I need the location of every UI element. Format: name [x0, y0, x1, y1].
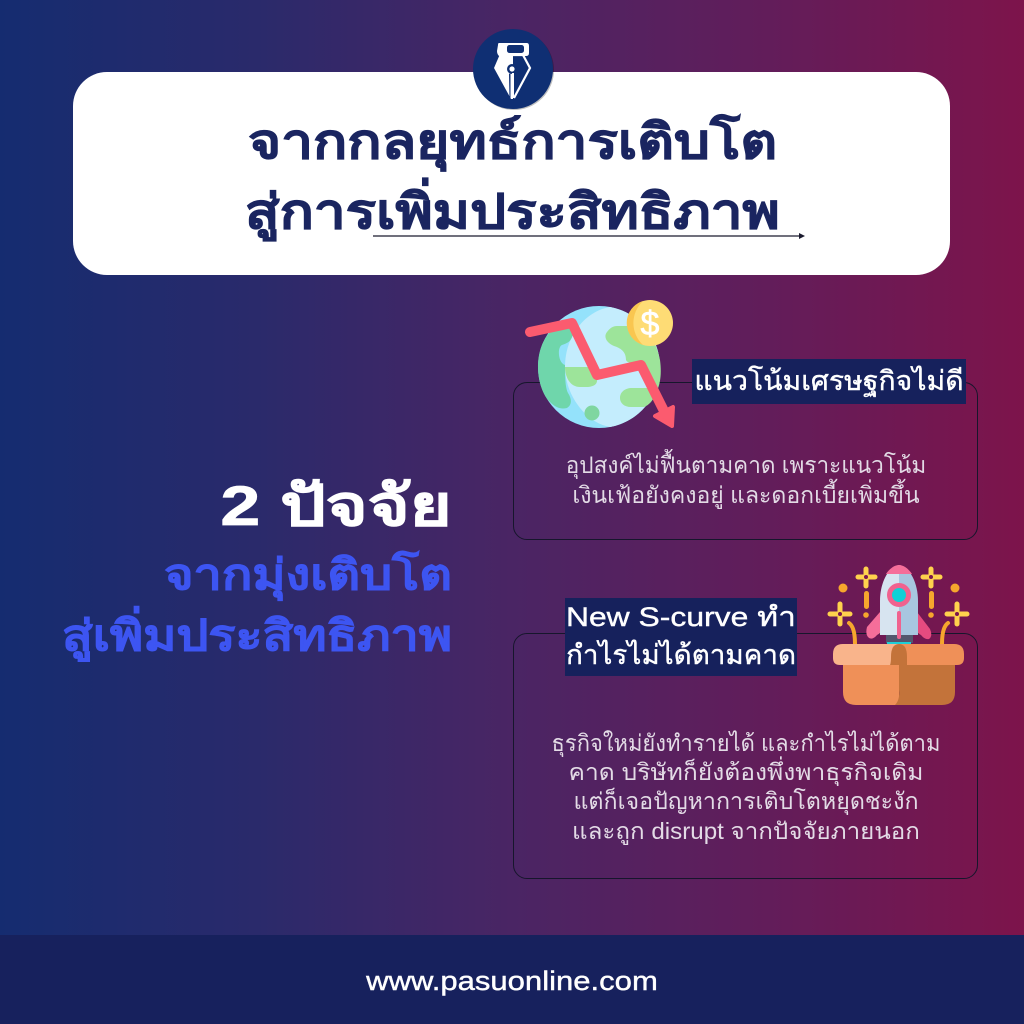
panel: economy	[513, 382, 978, 540]
text block: economy: อุปสงค์ไม่ฟื้นตามคาด เพราะแนวโน้ม	[566, 452, 926, 478]
icon: globe with falling arrow: $	[641, 305, 660, 343]
text block: new s-curve: แต่ก็เจอปัญหาการเติบโตหยุดชะงัก	[573, 788, 919, 814]
text block: economy	[566, 449, 926, 509]
title line 1: จากกลยุทธ์การเติบโต	[248, 116, 777, 169]
subheading line 1: จากมุ่งเติบโต	[164, 551, 452, 598]
title line 2: สู่การเพิ่มประสิทธิภาพ	[245, 186, 780, 239]
icon: rocket in box	[828, 565, 970, 705]
label: economy	[692, 359, 966, 404]
subheading line 2: สู่เพิ่มประสิทธิภาพ	[62, 612, 452, 659]
text block: economy: เงินเฟ้อยังคงอยู่ และดอกเบี้ยเพิ่มขึ้น	[572, 482, 920, 508]
icon: globe with falling arrow	[525, 300, 675, 428]
text block: new s-curve: คาด บริษัทก็ยังต้องพึ่งพาธุรกิจเดิม	[569, 759, 923, 785]
text block: new s-curve	[552, 730, 940, 845]
underline arrow	[373, 233, 805, 239]
text block: new s-curve: และถูก disrupt จากปัจจัยภายนอก	[572, 818, 920, 844]
label: new s-curve	[565, 598, 797, 676]
text block: new s-curve: ธุรกิจใหม่ยังทำรายได้ และกำไรไม่ได้ตาม	[552, 730, 940, 756]
logo: pen nib	[473, 29, 554, 110]
label text: แนวโน้มเศรษฐกิจไม่ดี	[694, 366, 964, 396]
website url: www.pasuonline.com	[366, 966, 658, 996]
panel: new s-curve	[513, 633, 978, 879]
label line 2: กำไรไม่ได้ตามคาด	[566, 640, 796, 670]
heading: 2 factors: 2 ปัจจัย	[221, 474, 452, 537]
footer	[0, 935, 1024, 1024]
label line 1: New S-curve ทำ	[566, 602, 796, 632]
left heading	[62, 474, 452, 662]
title card	[73, 72, 950, 275]
